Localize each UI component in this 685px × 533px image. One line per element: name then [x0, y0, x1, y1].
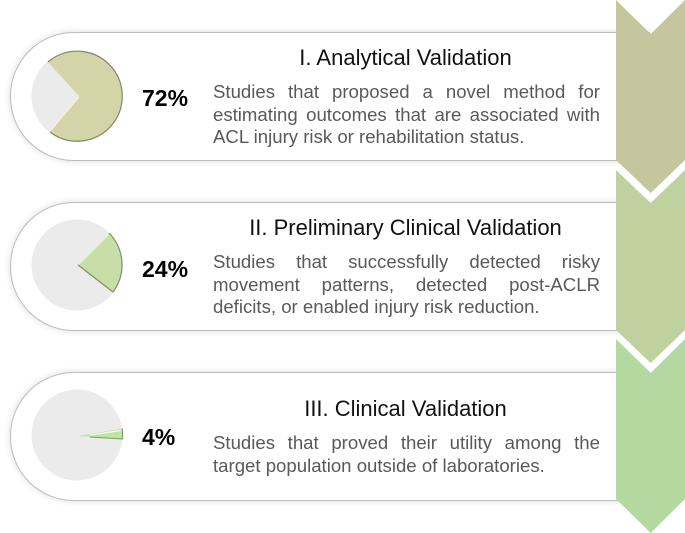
text: analytical validation description: [213, 81, 600, 147]
chevron: stage III: [616, 339, 685, 533]
text: preliminary clinical validation description: movement patterns, detected post-ACLR: [213, 274, 600, 294]
heading: III. Clinical Validation: III. Clinical Validation: [304, 396, 507, 421]
text: analytical validation description: ACL injury risk or rehabilitation status.: [213, 126, 524, 147]
panel: preliminary clinical validation: [10, 202, 650, 331]
pie chart: 24%: [32, 220, 122, 310]
percentage: 4%: 4%: [142, 424, 175, 450]
text: analytical validation description: estimating outcomes that are associated with: [213, 104, 600, 124]
text: preliminary clinical validation description: Studies that successfully detected risky: [213, 251, 600, 272]
chevron: stage I: [616, 0, 685, 193]
pie chart: 72%: [32, 50, 122, 142]
text: clinical validation description: Studies that proved their utility among the: [213, 432, 600, 453]
percentage: 72%: 72%: [142, 85, 188, 111]
heading: II. Preliminary Clinical Validation: II. Preliminary Clinical Validation: [249, 215, 562, 240]
text: clinical validation description: target population outside of laboratories.: [213, 454, 545, 476]
panel: clinical validation: [10, 372, 650, 501]
text: analytical validation description: Studies that proposed a novel method for: [213, 81, 600, 102]
panel: analytical validation: [10, 32, 650, 161]
chevron: stage II: [616, 170, 685, 363]
pie chart: 4%: [32, 390, 122, 480]
text: preliminary clinical validation description: deficits, or enabled injury risk reduction.: [213, 296, 540, 317]
text: preliminary clinical validation description: [213, 251, 600, 317]
heading: I. Analytical Validation: I. Analytical Validation: [299, 45, 512, 70]
percentage: 24%: 24%: [142, 256, 188, 282]
text: clinical validation description: [213, 432, 600, 476]
